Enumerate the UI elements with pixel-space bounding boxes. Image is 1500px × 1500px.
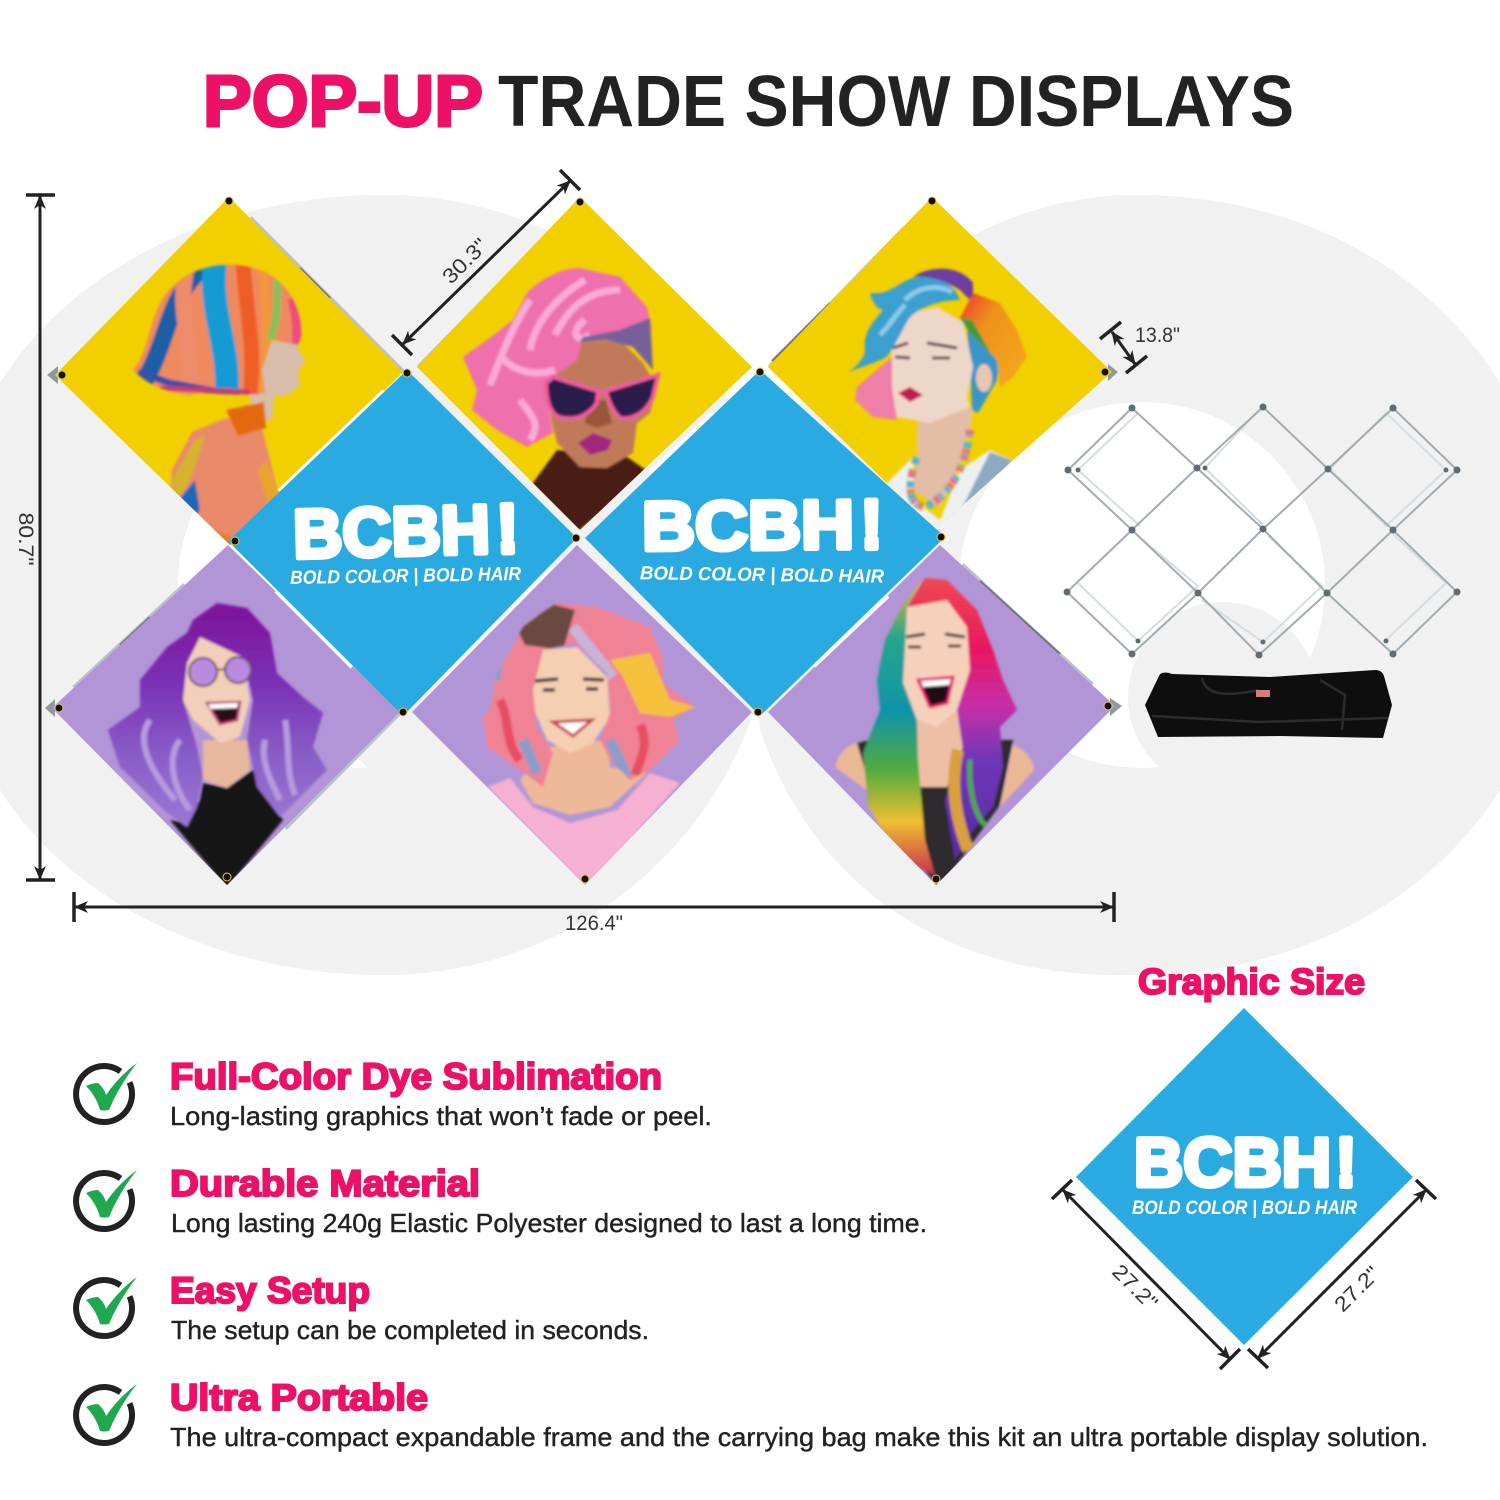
portrait: nose <box>585 400 612 428</box>
portrait: neck and chest <box>520 740 647 815</box>
portrait: bead necklace <box>910 430 970 507</box>
title: POP-UP <box>203 62 483 142</box>
portrait: teeth <box>209 703 238 709</box>
panel: blue brand panel right <box>585 370 945 716</box>
description: The setup can be completed in seconds. <box>171 1315 649 1345</box>
feature: durable material <box>76 1163 927 1238</box>
dimension: depth 13.8 <box>1100 322 1180 373</box>
dimension: panel edge 30.3 <box>392 170 580 355</box>
portrait: blue hair <box>848 275 960 372</box>
brand text: tagline: BOLD COLOR | BOLD HAIR <box>640 563 884 588</box>
portrait: ear <box>976 364 992 392</box>
portrait: pastel hair <box>480 600 700 790</box>
feature list <box>76 1056 1428 1452</box>
portrait: green strand <box>970 760 985 825</box>
panel: purple portrait with long rainbow hair <box>760 540 1125 890</box>
portrait art: profile woman <box>132 262 306 545</box>
portrait: face <box>547 340 657 468</box>
feature: easy setup <box>76 1270 649 1345</box>
description: Long-lasting graphics that won’t fade or peel. <box>170 1101 712 1131</box>
portrait: colored jacket <box>169 416 280 545</box>
background: light grey logo shapes <box>0 195 1500 975</box>
heading: Full-Color Dye Sublimation <box>170 1056 662 1097</box>
icon: check <box>76 1277 137 1336</box>
heading: Easy Setup <box>170 1270 370 1311</box>
portrait: violet hair <box>108 603 327 827</box>
dimension: left edge 27.2 <box>1052 1180 1240 1369</box>
carrying bag <box>1145 670 1392 738</box>
feature: ultra portable <box>76 1377 1428 1452</box>
portrait art: blue hair woman <box>848 269 1027 537</box>
portrait: gold strand <box>954 750 968 850</box>
portrait: white top with straps <box>886 448 1014 529</box>
portrait: neck <box>913 407 973 507</box>
portrait: neck and face profile <box>250 340 305 420</box>
portrait: face <box>903 600 970 727</box>
portrait: rainbow striped hair <box>132 262 304 397</box>
collapsible frame <box>1064 404 1460 658</box>
brand text: tagline: BOLD COLOR | BOLD HAIR <box>1132 1198 1357 1219</box>
portrait: laughing mouth <box>918 677 953 707</box>
portrait: black tank top <box>857 740 1013 888</box>
brand text: BCBH!: BCBH <box>642 486 854 565</box>
description: The ultra-compact expandable frame and the carrying bag make this kit an ultra portable display solution. <box>170 1422 1428 1452</box>
panel: purple portrait with pastel wavy hair <box>405 540 760 890</box>
portrait: face <box>533 647 610 753</box>
portrait: black top <box>170 770 283 888</box>
portrait: smile <box>553 720 592 736</box>
panel: yellow profile portrait with rainbow bob <box>55 201 403 545</box>
dimension: depth 13.8: 13.8" <box>1135 324 1180 347</box>
portrait: neck and chest <box>530 450 650 532</box>
panel grommets <box>55 197 1112 883</box>
dimension: width 126.4 <box>74 892 1114 935</box>
dimension: right edge 27.2: 27.2" <box>1330 1262 1385 1317</box>
portrait: purple hair crest <box>913 269 973 303</box>
title <box>203 62 1294 142</box>
brand text: tagline: BOLD COLOR | BOLD HAIR <box>290 564 521 589</box>
heading: Durable Material <box>170 1163 480 1204</box>
heading: Ultra Portable <box>170 1377 428 1418</box>
dimension: right edge 27.2 <box>1248 1180 1436 1368</box>
panel: yellow portrait with blue rainbow hair <box>760 190 1120 537</box>
portrait: neck and chest <box>912 703 963 787</box>
panel: blue brand panel left <box>228 370 577 716</box>
portrait: lips <box>898 387 923 402</box>
portrait: hair highlights <box>490 280 620 440</box>
portrait: grey purple undercut <box>580 318 653 370</box>
graphic diamond <box>1076 1008 1413 1345</box>
portrait: grey blue strap <box>961 451 1012 506</box>
dimension: height 80.7: 80.7" <box>14 512 37 566</box>
dimension: height 80.7 <box>14 195 55 880</box>
portrait: teeth <box>921 679 951 687</box>
portrait: purple lips <box>578 433 612 455</box>
brand text: BCBH!: ! <box>496 490 519 568</box>
portrait: laughing mouth <box>207 702 240 724</box>
panel: yellow portrait with pink hair and sunglasses <box>410 190 760 535</box>
portrait: eyes and brows <box>893 343 957 358</box>
portrait art: pastel hair woman <box>480 600 700 888</box>
portrait: pink shirt <box>488 773 680 888</box>
portrait: shoulders <box>835 742 1034 807</box>
icon: check <box>76 1063 137 1122</box>
portrait: pink sunglasses <box>546 375 658 419</box>
graphic size diagram <box>1052 961 1436 1369</box>
portrait: eyes and brows <box>906 634 965 647</box>
brand text: BCBH!: BCBH <box>1134 1124 1331 1201</box>
brand text: BCBH!: ! <box>1336 1124 1356 1201</box>
brand text: BCBH!: BCBH <box>292 491 491 573</box>
frame: primary tubes <box>1067 407 1457 655</box>
icon: check <box>76 1384 137 1443</box>
title: TRADE SHOW DISPLAYS <box>498 62 1294 142</box>
portrait: pink hair ends <box>855 357 897 420</box>
portrait: eyes and brows <box>535 679 604 690</box>
icon: check <box>76 1170 137 1229</box>
feature: full-color dye sublimation <box>76 1056 712 1131</box>
portrait: left hair <box>863 578 935 875</box>
dimension: left edge 27.2: 27.2" <box>1107 1260 1162 1315</box>
portrait: right hair <box>907 578 1017 860</box>
heading: graphic size: Graphic Size <box>1138 961 1365 1002</box>
portrait: rainbow hair <box>960 293 1027 387</box>
portrait: blue hair highlights <box>880 287 952 335</box>
dimension: panel edge 30.3: 30.3" <box>438 234 493 289</box>
portrait art: violet hair woman <box>108 603 327 888</box>
portrait: hair highlights <box>144 720 295 810</box>
portrait: face <box>183 637 250 743</box>
description: Long lasting 240g Elastic Polyester designed to last a long time. <box>171 1208 927 1238</box>
frame edges behind panels <box>45 218 1122 828</box>
white gaps beside blue panels <box>277 392 887 675</box>
portrait: pink voluminous hair <box>463 268 652 447</box>
panel: purple portrait with violet curly hair <box>45 540 410 890</box>
portrait art: pink hair woman <box>463 268 658 532</box>
portrait: blue undercut <box>967 330 1000 413</box>
brand text: BCBH!: ! <box>861 486 882 563</box>
portrait: neck <box>203 740 250 788</box>
portrait art: rainbow hair woman <box>835 578 1034 888</box>
dimension: width 126.4: 126.4" <box>565 912 623 935</box>
portrait: round glasses <box>189 657 251 686</box>
frame: joints <box>1064 404 1460 658</box>
portrait: orange turtleneck <box>226 402 266 436</box>
frame: secondary tubes <box>1078 412 1446 642</box>
portrait: face <box>890 307 973 423</box>
